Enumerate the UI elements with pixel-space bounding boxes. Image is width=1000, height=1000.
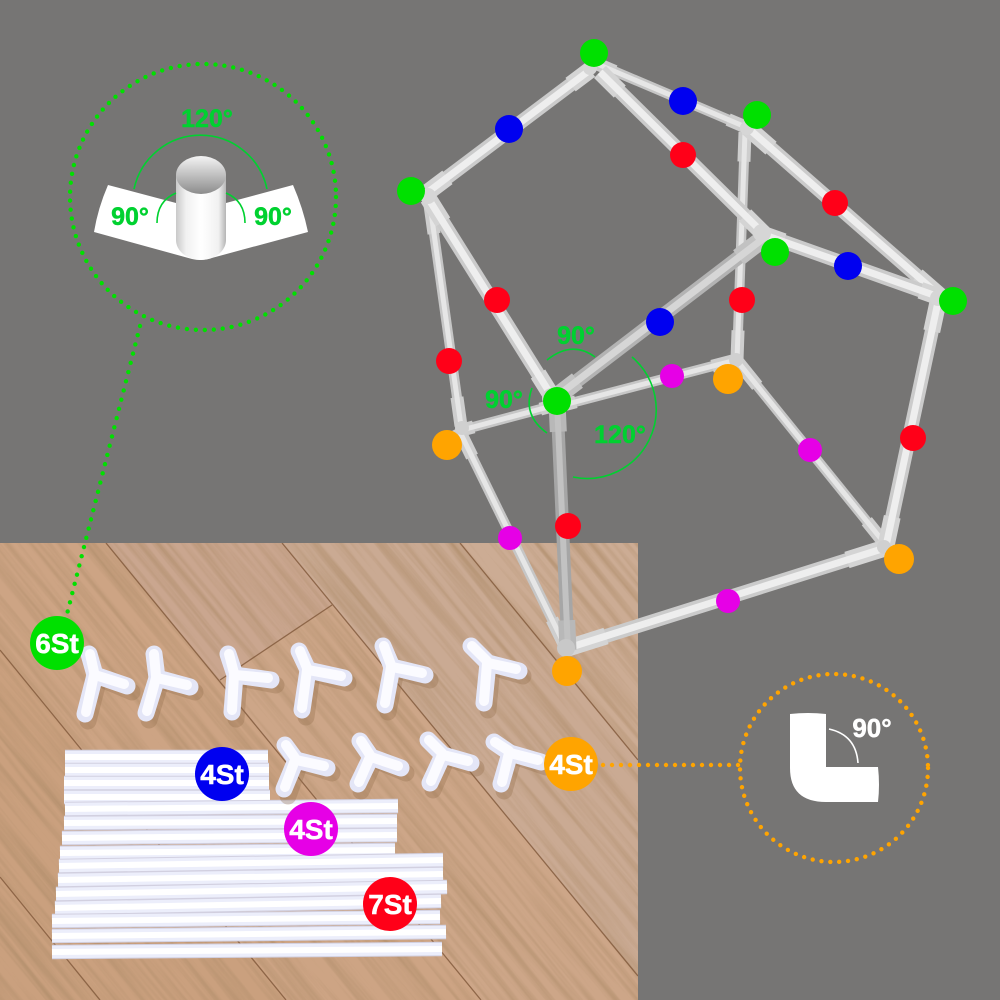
frame colour dots — [397, 39, 967, 686]
Y connectors, lower four-piece set — [284, 740, 546, 796]
badge: 4St orange: 4St — [549, 749, 593, 780]
inset: green connector detail: 120° — [181, 105, 233, 133]
badge: 6St green — [30, 616, 84, 670]
leader line: green — [66, 326, 140, 618]
inset: green connector detail: 90° — [111, 203, 149, 231]
inset: green connector detail — [70, 64, 336, 330]
white tubes bundle — [52, 757, 447, 952]
frame angle annotations: 120° — [594, 421, 646, 449]
inset: green connector detail: 90° — [254, 203, 292, 231]
badge: 7St red: 7St — [368, 889, 412, 920]
frame angle annotations: 90° — [485, 386, 523, 414]
inset: orange corner connector detail: 90° — [852, 713, 892, 743]
Y connectors, six-piece set — [85, 646, 523, 721]
wood floor photo panel — [0, 543, 638, 1000]
PVC cube frame — [397, 39, 967, 686]
badge: 6St green: 6St — [35, 628, 79, 659]
badge: 4St magenta — [284, 802, 338, 856]
badge: 4St magenta: 4St — [289, 814, 333, 845]
icon: three-way connector — [94, 156, 308, 260]
leader line: orange — [603, 763, 742, 767]
frame angle annotations — [485, 322, 656, 478]
icon: corner connector — [790, 713, 879, 802]
inset: orange corner connector detail — [740, 674, 928, 862]
badge: 4St blue — [195, 747, 249, 801]
badge: 4St blue: 4St — [200, 759, 244, 790]
frame angle annotations: 90° — [557, 322, 595, 350]
badge: 4St orange — [544, 737, 598, 791]
badge: 7St red — [363, 877, 417, 931]
